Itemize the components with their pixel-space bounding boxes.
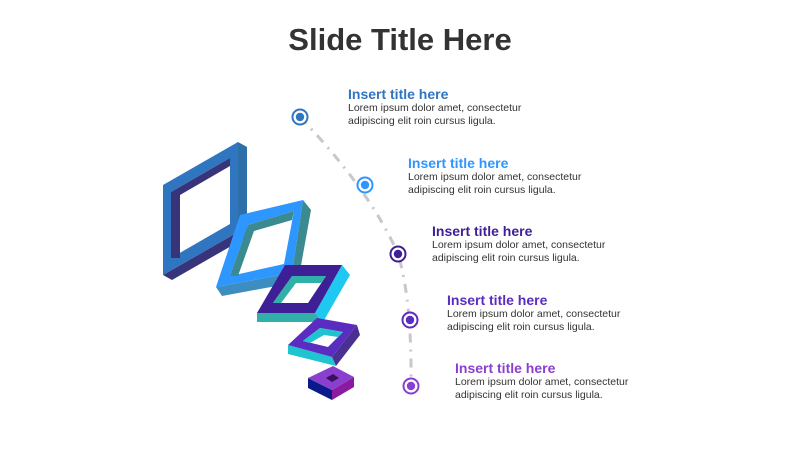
item 1: adipiscing elit roin cursus ligula. <box>348 114 496 126</box>
item 1: Lorem ipsum dolor amet, consectetur <box>348 102 521 114</box>
item 1: Insert title here <box>348 86 448 102</box>
shape 3 <box>257 265 350 322</box>
shape 1 <box>163 142 247 280</box>
item 4: adipiscing elit roin cursus ligula. <box>447 320 595 332</box>
item 3: Insert title here <box>432 223 532 239</box>
shape 5 <box>308 366 354 400</box>
dot 1 <box>292 110 308 124</box>
item 2: Lorem ipsum dolor amet, consectetur <box>408 171 581 183</box>
item 5: Insert title here <box>455 360 555 376</box>
title: Slide Title Here <box>288 22 512 57</box>
shape 2 <box>216 200 311 296</box>
dot 5 <box>404 378 418 394</box>
item 5: Lorem ipsum dolor amet, consectetur <box>455 376 628 388</box>
shape 4 <box>288 318 360 366</box>
dot 3 <box>390 246 406 262</box>
timeline dashed curve <box>300 117 411 386</box>
item 3: adipiscing elit roin cursus ligula. <box>432 252 580 264</box>
item 5: adipiscing elit roin cursus ligula. <box>455 388 603 400</box>
item 2: Insert title here <box>408 155 508 171</box>
item 5 <box>455 360 628 400</box>
dot 4 <box>402 312 418 328</box>
dot 2 <box>358 178 372 192</box>
item 3: Lorem ipsum dolor amet, consectetur <box>432 239 605 251</box>
item 4: Lorem ipsum dolor amet, consectetur <box>447 308 620 320</box>
item 4: Insert title here <box>447 292 547 308</box>
item 2 <box>408 155 582 196</box>
item 3 <box>432 223 606 264</box>
item 2: adipiscing elit roin cursus ligula. <box>408 184 556 196</box>
item 4 <box>447 292 620 332</box>
item 1 <box>348 86 522 126</box>
